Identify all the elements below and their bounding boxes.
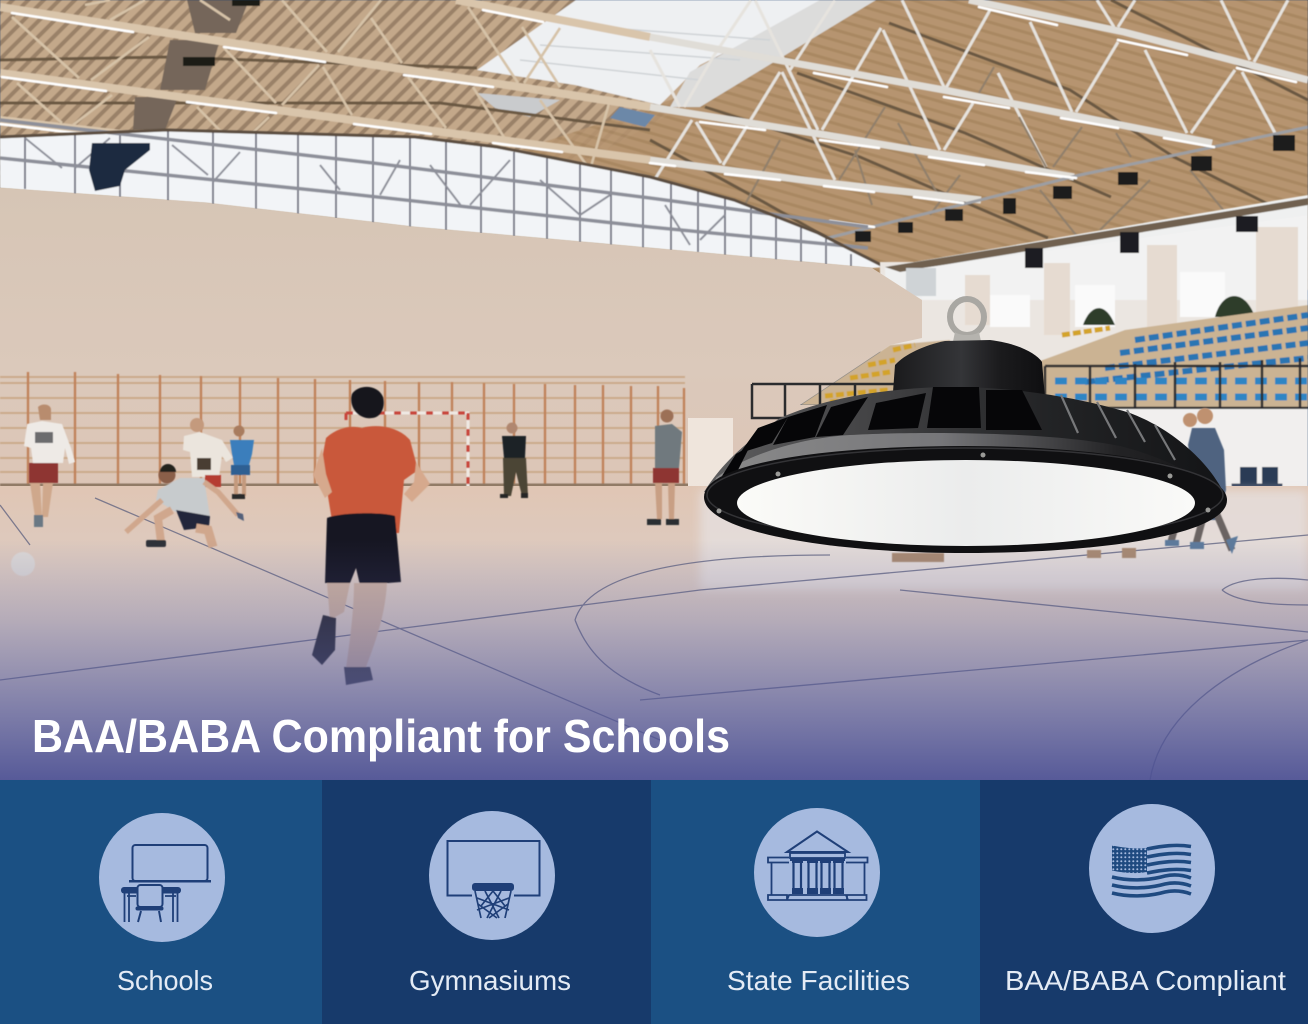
label: gymnasiums: Gymnasiums <box>409 965 571 996</box>
light strips <box>0 7 1296 227</box>
label: baa/baba compliant: BAA/BABA Compliant <box>1005 965 1286 996</box>
wall bars <box>0 372 690 490</box>
truss diagonals left <box>12 0 610 170</box>
icon: basketball hoop <box>429 811 555 940</box>
wall door <box>688 418 733 486</box>
icon: government building <box>754 808 880 937</box>
panel: baa/baba compliant <box>980 780 1308 1024</box>
truss diagonals right <box>650 0 1288 187</box>
player: running boy in orange <box>312 387 430 685</box>
gym floor <box>0 486 1308 780</box>
label: state facilities: State Facilities <box>727 965 910 996</box>
player: blue shirt <box>230 426 254 499</box>
photo: school gymnasium <box>0 0 1308 780</box>
gym windows <box>0 120 885 268</box>
players behind lamp <box>892 408 1238 562</box>
left railing <box>752 384 895 418</box>
skylight <box>477 0 830 105</box>
back wall <box>0 188 922 490</box>
ball <box>11 552 35 576</box>
icon: classroom <box>99 813 225 942</box>
main beams <box>0 0 650 198</box>
lamp lens <box>737 460 1195 546</box>
panel: state facilities <box>651 780 980 1024</box>
ceiling <box>0 0 1308 290</box>
player: white shirt, red shorts <box>24 405 75 527</box>
eye bolt <box>950 299 984 346</box>
ducts <box>133 0 249 130</box>
bottom colour fade <box>0 540 1308 780</box>
track lines and spot lights <box>820 127 1308 240</box>
lamp heat-sink dome <box>704 387 1227 500</box>
handball goal <box>346 413 468 490</box>
icon: american flag <box>1089 804 1215 933</box>
right side stands <box>800 195 1308 503</box>
lamp rim <box>704 446 1227 553</box>
label: schools: Schools <box>117 965 213 996</box>
player: crouching <box>126 464 244 547</box>
title: BAA/BABA Compliant for Schools <box>32 710 730 762</box>
panel: gymnasiums <box>322 780 651 1024</box>
product: LED high-bay UFO lamp <box>704 299 1227 553</box>
lamp screws <box>716 452 1210 514</box>
players <box>11 387 1238 685</box>
panel: schools <box>0 780 322 1024</box>
player: black shirt, camo trousers <box>500 422 528 498</box>
player: grey shirt, red shorts <box>647 410 682 525</box>
purlins <box>0 0 1308 262</box>
lamp collar <box>893 340 1045 398</box>
player: white shirt behind <box>183 418 233 487</box>
